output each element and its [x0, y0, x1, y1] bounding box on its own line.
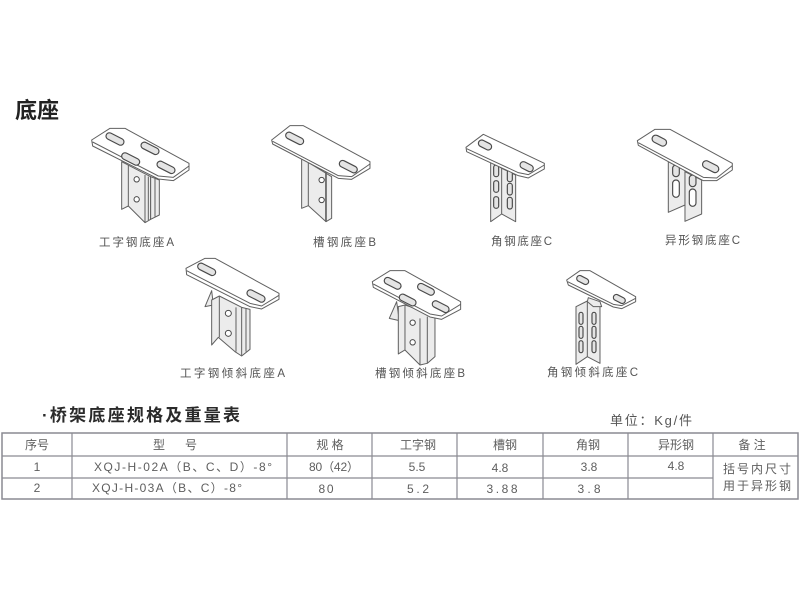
table row 1: 4.8 [492, 461, 509, 475]
unit note: 单位：Kg/件 [610, 413, 692, 428]
table header: 异形钢 [658, 438, 694, 452]
table header: 序号 [25, 437, 49, 452]
table note cell: 用于异形钢 [723, 479, 791, 493]
table row 1: 5.5 [409, 460, 426, 474]
table note cell [723, 461, 791, 493]
icon: angle base C [466, 134, 544, 222]
table row 2: 5.2 [407, 482, 429, 496]
table header: 备 注 [738, 437, 766, 452]
table header: 型 号 [153, 438, 197, 452]
icon: angle inclined base C [567, 271, 636, 364]
label: I-beam base A: 工字钢底座A [99, 235, 174, 249]
table row 1: 4.8 [668, 459, 685, 473]
table note cell: 括号内尺寸 [723, 461, 791, 476]
label: angle base C: 角钢底座C [491, 234, 552, 248]
table row 1: 3.8 [581, 460, 598, 474]
table row 2: 3.8 [578, 482, 601, 496]
table header: 槽钢 [493, 438, 517, 452]
label: special-section base C: 异形钢底座C [665, 233, 740, 247]
label: I-beam inclined base A: 工字钢倾斜底座A [180, 366, 285, 380]
table header: 工字钢 [400, 437, 436, 452]
table row 1 [34, 459, 685, 475]
label: channel inclined base B: 槽钢倾斜底座B [375, 366, 465, 380]
table row 2: XQJ-H-03A（B、C）-8° [92, 481, 242, 495]
label: channel base B: 槽钢底座B [313, 235, 376, 249]
icon: I-beam inclined base A [186, 258, 279, 356]
icon: special-section base C [637, 129, 732, 221]
table row 2: 2 [34, 481, 41, 495]
title: 底座 [15, 98, 59, 123]
table header: 角钢 [576, 438, 600, 452]
table row 1: 1 [34, 460, 41, 474]
table row 2: 80 [318, 482, 334, 496]
table row 2 [34, 481, 601, 496]
table row 1: 80（42） [309, 460, 359, 474]
table row 2: 3.88 [486, 482, 518, 496]
icon: I-beam base A [92, 128, 189, 223]
heading: table title: ·桥架底座规格及重量表 [42, 405, 240, 425]
label: angle inclined base C: 角钢倾斜底座C [547, 365, 638, 379]
table: specifications and weights [2, 433, 798, 499]
table row 1: XQJ-H-02A（B、C、D）-8° [94, 460, 272, 474]
table header: 规 格 [316, 437, 344, 452]
table header [25, 437, 766, 452]
icon: channel inclined base B [372, 271, 461, 365]
icon: channel base B [272, 126, 370, 222]
